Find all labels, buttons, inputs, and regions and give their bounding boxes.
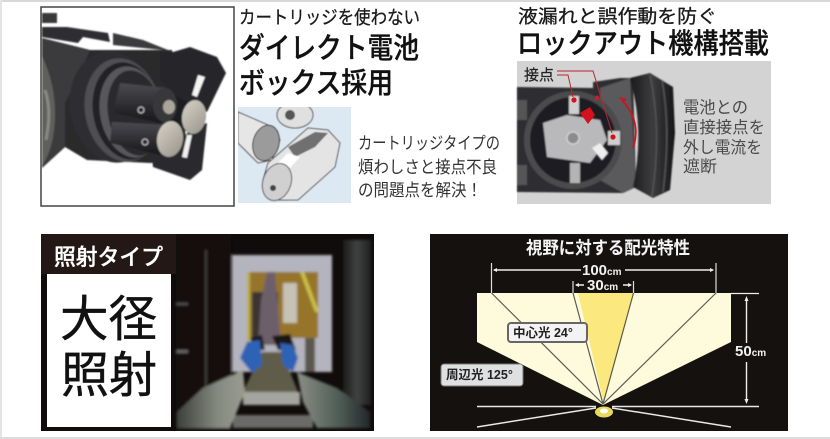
light beams bbox=[477, 293, 731, 405]
white label: large diameter: 大径 bbox=[60, 293, 157, 347]
label: peripheral light bbox=[441, 364, 523, 386]
heading: direct battery box: ボックス採用 bbox=[239, 67, 393, 100]
lamp icon bbox=[595, 406, 613, 418]
header label bbox=[41, 234, 176, 274]
panel: cartridge illustration bbox=[238, 102, 351, 205]
label: central light: 中心光 24° bbox=[513, 325, 573, 340]
text: cartridge problem solved: カートリッジタイプの bbox=[358, 134, 500, 153]
text: cuts direct contact bbox=[683, 98, 765, 176]
lock icon and contact dots bbox=[571, 96, 636, 148]
panel: lockout photo bbox=[517, 61, 771, 204]
heading: lockout mechanism: ロックアウト機構搭載 bbox=[517, 28, 769, 59]
dimension 50cm: 50cm bbox=[735, 343, 766, 360]
text: cuts direct contact: 遮断 bbox=[683, 157, 717, 176]
work photo bbox=[176, 234, 371, 431]
panel: headlamp battery photo bbox=[41, 7, 234, 206]
text: cuts direct contact: 外し電流を bbox=[683, 138, 762, 157]
text: cuts direct contact: 電池との bbox=[683, 98, 748, 117]
white label: large diameter bbox=[47, 274, 171, 427]
dimension 100cm: 100cm bbox=[582, 262, 622, 279]
heading: direct battery box: ダイレクト電池 bbox=[239, 32, 419, 65]
diagram title: 視野に対する配光特性 bbox=[526, 238, 690, 258]
heading: lockout mechanism: 液漏れと誤作動を防ぐ bbox=[518, 6, 717, 27]
heading: direct battery box: カートリッジを使わない bbox=[239, 7, 420, 28]
dimension 30cm: 30cm bbox=[587, 277, 618, 294]
text: cuts direct contact: 直接接点を bbox=[683, 118, 765, 137]
label: central light bbox=[508, 323, 587, 342]
heading: lockout mechanism bbox=[517, 6, 769, 59]
beam lines and dimensions bbox=[477, 263, 759, 427]
panel: light distribution diagram bbox=[430, 234, 788, 431]
contact label: 接点 bbox=[524, 67, 554, 84]
heading: direct battery box bbox=[239, 7, 420, 100]
white label: large diameter: 照射 bbox=[61, 349, 157, 403]
header label: 照射タイプ bbox=[54, 245, 163, 270]
contact label bbox=[524, 67, 612, 133]
headlamp body bbox=[42, 13, 226, 180]
text: cartridge problem solved: 煩わしさと接点不良 bbox=[358, 158, 497, 177]
panel: illumination type bbox=[41, 234, 374, 431]
text: cartridge problem solved: の問題点を解決！ bbox=[358, 181, 482, 200]
text: cartridge problem solved bbox=[358, 134, 500, 200]
label: peripheral light: 周辺光 125° bbox=[446, 367, 513, 382]
